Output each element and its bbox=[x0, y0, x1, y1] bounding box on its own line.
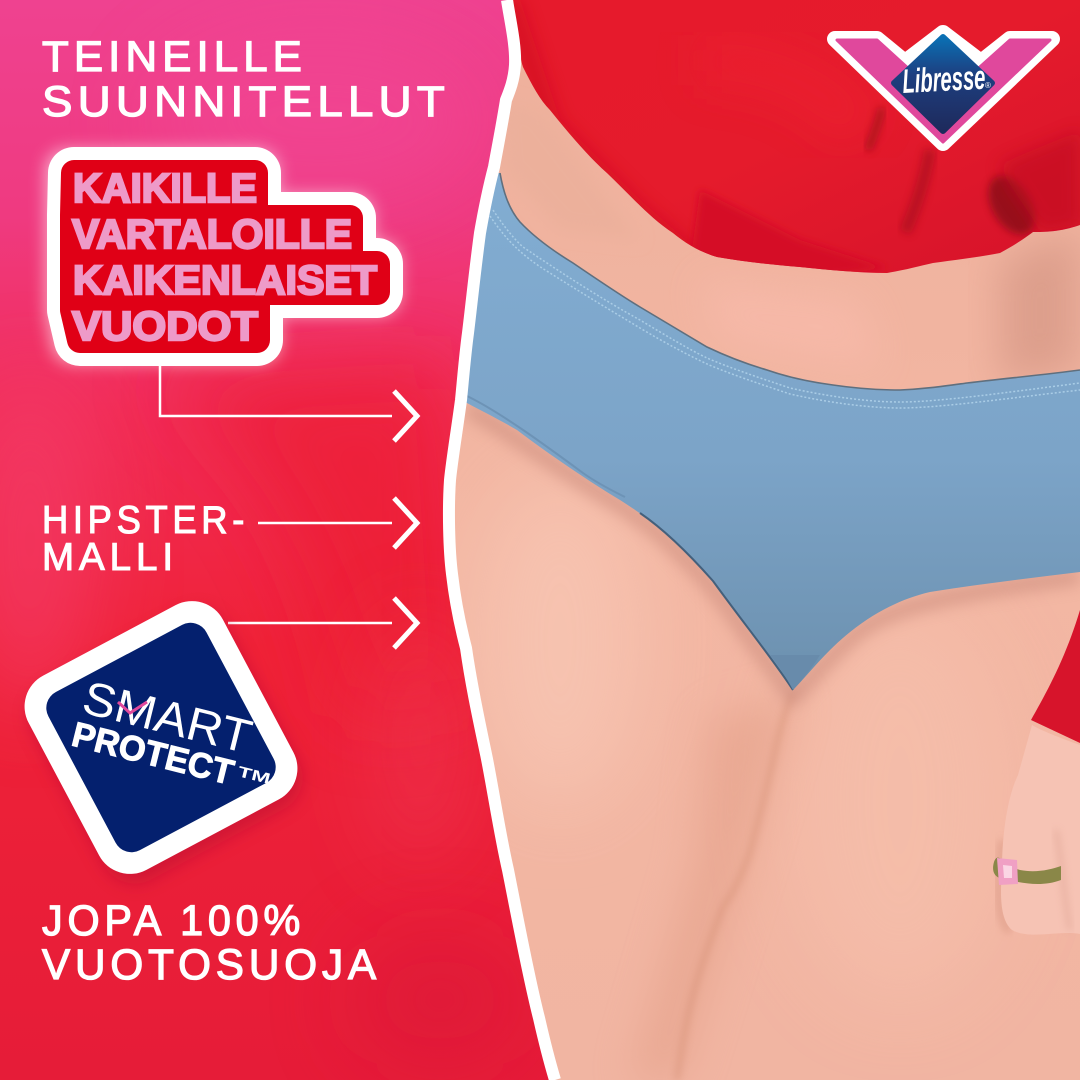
heading: teineille suunnitellut bbox=[42, 33, 450, 126]
text: jopa 100% vuotosuoja: VUOTOSUOJA bbox=[42, 941, 381, 989]
heading: teineille suunnitellut: SUUNNITELLUT bbox=[42, 78, 450, 126]
badge: smart protect bbox=[12, 589, 315, 896]
leg edge bbox=[640, 513, 793, 690]
label: hipster-malli: MALLI bbox=[42, 536, 178, 579]
thigh shading bbox=[488, 500, 632, 780]
hand with ring bbox=[993, 725, 1080, 935]
sticker: kaikille vartaloille kaikenlaiset vuodot: VARTALOILLE bbox=[72, 211, 352, 257]
stitching bbox=[493, 210, 1080, 402]
badge: smart protect: TM bbox=[236, 763, 272, 788]
logo: libresse: ® bbox=[985, 81, 991, 90]
gusset bbox=[786, 678, 795, 690]
sticker: kaikille vartaloille kaikenlaiset vuodot: KAIKENLAISET bbox=[73, 257, 377, 303]
text: jopa 100% vuotosuoja: JOPA 100% bbox=[42, 897, 305, 945]
badge: smart protect: PROTECT bbox=[68, 715, 238, 793]
sweater bbox=[500, 0, 1080, 280]
logo: libresse bbox=[835, 33, 1052, 143]
arrow: hipster-malli bbox=[258, 498, 417, 548]
underwear bbox=[440, 173, 1080, 690]
sticker: kaikille vartaloille kaikenlaiset vuodot: KAIKILLE bbox=[73, 165, 257, 211]
text: jopa 100% vuotosuoja bbox=[42, 897, 381, 989]
sticker: kaikille vartaloille kaikenlaiset vuodot: VUODOT bbox=[72, 303, 258, 349]
label: hipster-malli bbox=[42, 499, 249, 579]
arrow: sticker to underwear bbox=[160, 366, 417, 441]
white wavy divider bbox=[449, 0, 555, 1080]
heading: teineille suunnitellut: TEINEILLE bbox=[42, 33, 307, 81]
sticker: kaikille vartaloille kaikenlaiset vuodot bbox=[66, 165, 380, 349]
underwear shadow bbox=[467, 408, 1080, 698]
logo: libresse: Libresse bbox=[901, 59, 986, 101]
skin bbox=[440, 0, 1080, 1080]
torso shading bbox=[1000, 230, 1080, 385]
sleeve bbox=[1031, 610, 1080, 743]
left background panel bbox=[0, 0, 560, 1080]
photo: model wearing period underwear bbox=[440, 0, 1080, 1080]
badge: smart protect: SMART bbox=[78, 670, 257, 763]
waistband edge bbox=[500, 173, 1080, 390]
label: hipster-malli: HIPSTER- bbox=[42, 499, 249, 542]
arrow: smart protect bbox=[228, 598, 417, 648]
